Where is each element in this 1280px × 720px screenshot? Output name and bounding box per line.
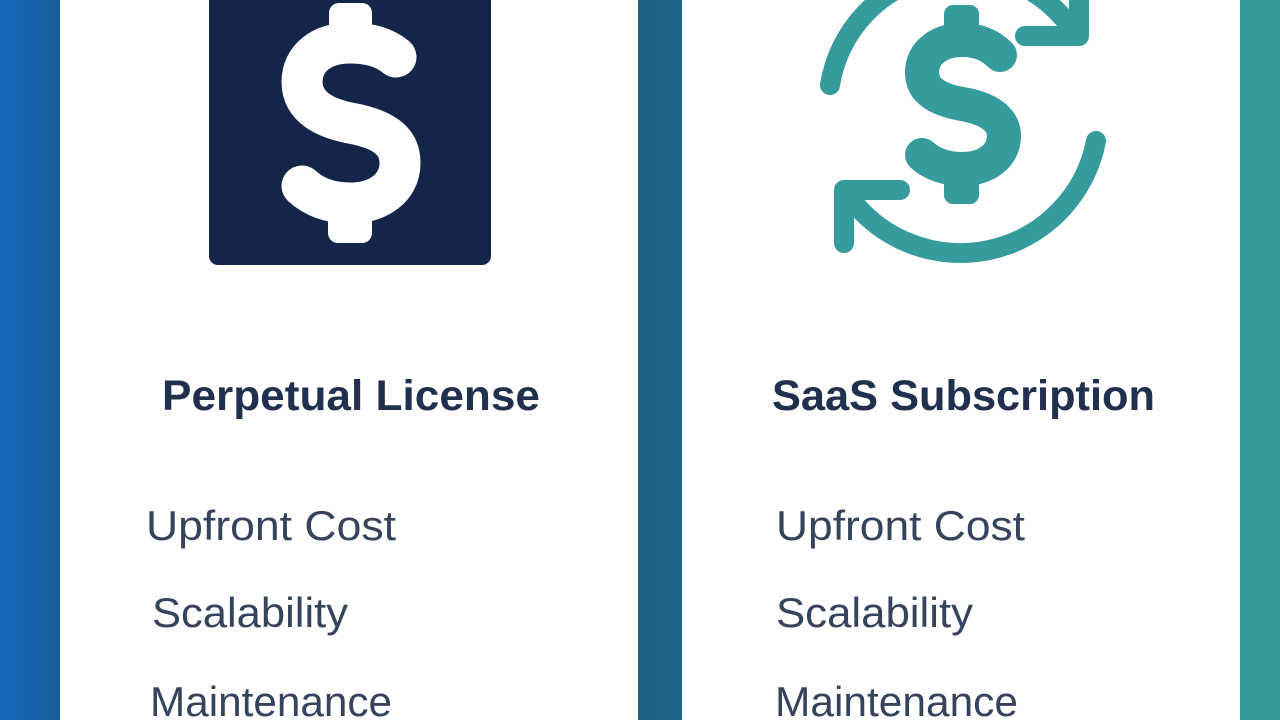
left blue strip xyxy=(0,0,60,720)
right teal strip xyxy=(1240,0,1280,720)
text: upfront cost: Upfront Cost xyxy=(146,502,396,549)
text: upfront cost: Upfront Cost xyxy=(776,502,1025,549)
text: scalability: Scalability xyxy=(152,589,348,636)
middle blue-teal strip xyxy=(638,0,682,720)
heading: perpetual license: Perpetual License xyxy=(162,372,540,420)
text: scalability: Scalability xyxy=(776,589,973,636)
panel: perpetual license xyxy=(60,0,638,720)
icon: dollar sign in navy square xyxy=(209,0,491,265)
heading: saas subscription: SaaS Subscription xyxy=(772,372,1155,420)
panel: saas subscription xyxy=(682,0,1240,720)
icon: dollar sign with circular arrows xyxy=(830,0,1096,253)
